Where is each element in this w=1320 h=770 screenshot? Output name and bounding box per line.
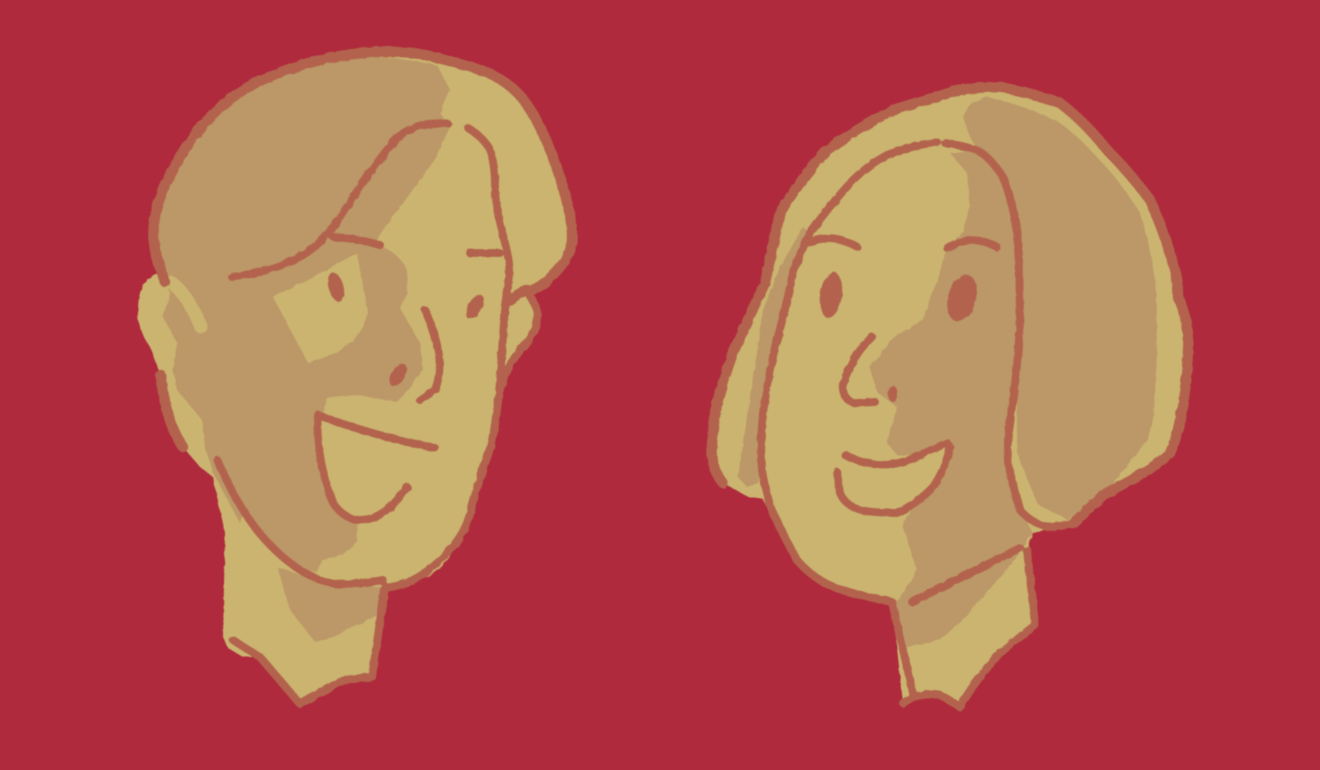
left head: man [138, 52, 572, 705]
right head right neck [903, 550, 1035, 707]
right head base silhouette [712, 87, 1188, 707]
right head shadow: left hair strip [738, 227, 810, 487]
left head mouth [318, 415, 435, 520]
right head shadow: hair [963, 97, 1157, 520]
left head nose [420, 310, 440, 400]
right head: woman [712, 87, 1188, 707]
left head base silhouette [138, 52, 572, 705]
left head jaw [217, 460, 383, 584]
left head right brow [470, 249, 500, 257]
left head right ear [500, 291, 538, 390]
right head left eye [817, 271, 845, 319]
right head nostril [888, 386, 898, 402]
left head left eye [325, 271, 347, 303]
right head shadow: face [870, 150, 1033, 602]
left head right eye [462, 292, 488, 322]
left head nostril [386, 361, 410, 389]
right head nose [843, 337, 875, 403]
left head light patch on cheek [273, 253, 368, 363]
left head left brow [333, 237, 380, 245]
left head light ear strip [172, 283, 201, 327]
right head outline [712, 87, 1188, 523]
right head hair curtain [945, 143, 1073, 527]
left head side of face and hair [385, 128, 509, 588]
right head hairline, jaw and left neck [761, 142, 937, 693]
left head shadow: hair and face [154, 57, 450, 572]
right head left brow [810, 238, 857, 247]
right head right brow [947, 240, 997, 248]
left head shadow: neck [277, 567, 384, 642]
right head shadow: neck [892, 550, 1022, 647]
left head hair parting [232, 123, 448, 277]
left head neck [233, 586, 385, 704]
right head right eye [942, 271, 982, 325]
right head mouth [837, 443, 950, 513]
right head chin line [912, 548, 1020, 602]
left head outline [154, 52, 572, 300]
left head back of neck [161, 375, 183, 447]
